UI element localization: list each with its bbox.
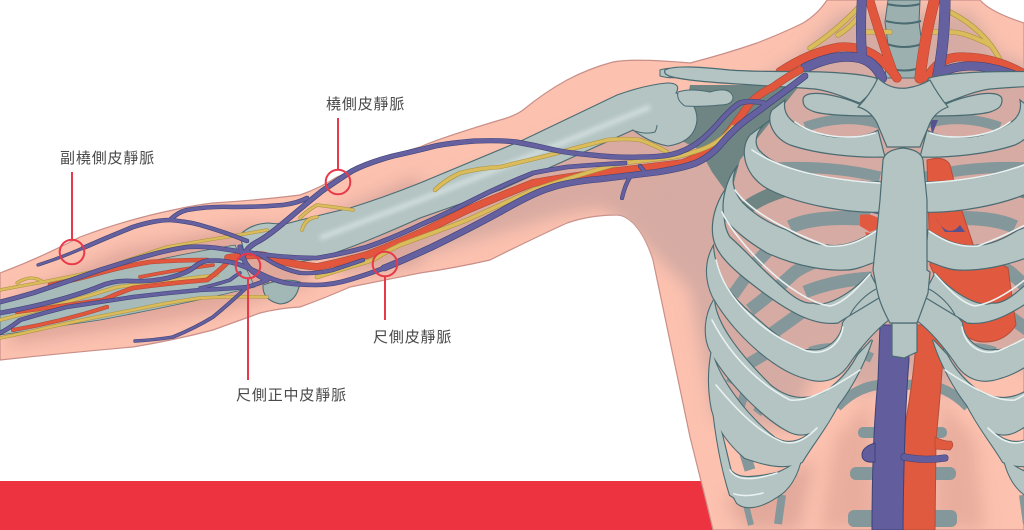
heart <box>860 120 1016 342</box>
vena cava <box>872 325 909 530</box>
label: 尺側正中皮靜脈 <box>236 254 347 404</box>
veins <box>0 76 805 341</box>
clavicle right <box>925 67 1024 103</box>
forearm bones <box>0 245 255 335</box>
spine shadows and neck spine <box>848 0 957 527</box>
ribs right <box>917 93 1024 507</box>
label: 尺側皮靜脈: 尺側皮靜脈 <box>373 329 452 346</box>
label: 橈側皮靜脈 <box>326 96 405 194</box>
median nerve <box>317 127 733 277</box>
clavicle left <box>665 67 880 103</box>
red bottom band <box>0 481 730 530</box>
label: 副橈側皮靜脈: 副橈側皮靜脈 <box>60 150 155 167</box>
label: 尺側正中皮靜脈: 尺側正中皮靜脈 <box>236 387 347 404</box>
shoulder bones <box>660 68 733 106</box>
neck nerves <box>810 8 1000 60</box>
label: 副橈側皮靜脈 <box>60 150 155 264</box>
neck veins <box>805 0 1024 80</box>
label: 橈側皮靜脈: 橈側皮靜脈 <box>326 96 405 113</box>
arteries <box>13 70 800 330</box>
elbow lower bump <box>263 280 300 304</box>
neck arteries <box>780 0 1024 78</box>
back rib bands right <box>907 119 1024 525</box>
vena cava branches <box>862 443 875 462</box>
back rib bands left <box>730 119 898 525</box>
aorta <box>903 325 945 530</box>
crossing vein <box>904 457 945 459</box>
label: 尺側皮靜脈 <box>373 252 452 346</box>
aorta branch <box>935 437 953 450</box>
ribs left <box>706 93 888 507</box>
humerus <box>240 83 697 262</box>
arm nerves <box>0 139 667 338</box>
sternum <box>858 78 948 358</box>
shoulder shadow <box>680 85 800 197</box>
